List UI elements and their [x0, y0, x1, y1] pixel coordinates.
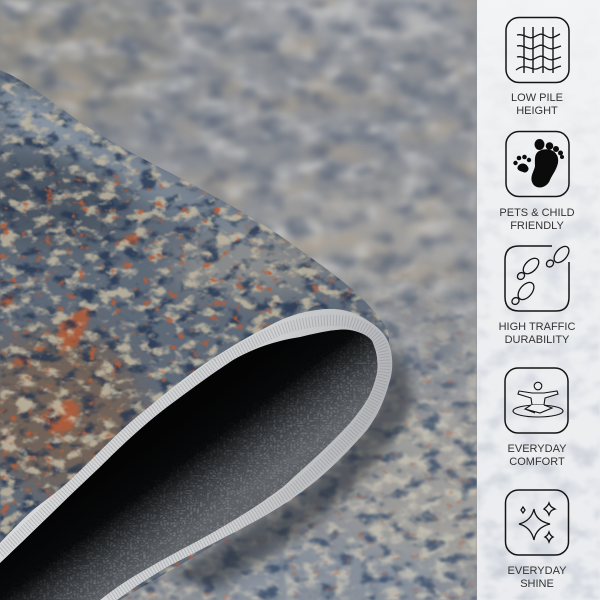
- label: pets and child friendly: PETS & CHILD: [499, 207, 575, 219]
- label: high traffic durability: HIGH TRAFFIC: [499, 321, 575, 333]
- feature: everyday shine: [506, 490, 568, 590]
- shadow under the rolled edge: [170, 345, 411, 590]
- icon: low pile: [506, 18, 569, 82]
- right feature panel: [477, 0, 600, 600]
- label: everyday comfort: EVERYDAY: [508, 443, 566, 455]
- label: everyday shine: SHINE: [520, 578, 554, 590]
- orange patches: [0, 232, 140, 444]
- feature: high traffic durability: [499, 244, 575, 346]
- feature: low pile height: [506, 18, 569, 117]
- feature: everyday comfort: [505, 368, 568, 468]
- label: low pile height: LOW PILE: [511, 92, 563, 104]
- label: everyday shine: EVERYDAY: [508, 565, 566, 577]
- icon: paw and foot: [506, 132, 569, 196]
- icon: footprints: [505, 244, 572, 311]
- label: low pile height: HEIGHT: [516, 105, 558, 117]
- white bound edge of the rug: [0, 309, 392, 600]
- rolled rug section: [0, 70, 390, 600]
- label: high traffic durability: DURABILITY: [505, 334, 570, 346]
- rug underside with mesh backing: [0, 330, 378, 600]
- icon: meditating figure: [505, 368, 568, 433]
- icon: sparkles: [506, 490, 568, 555]
- label: pets and child friendly: FRIENDLY: [510, 220, 564, 232]
- label: everyday comfort: COMFORT: [509, 456, 565, 468]
- feature: pets and child friendly: [499, 132, 575, 232]
